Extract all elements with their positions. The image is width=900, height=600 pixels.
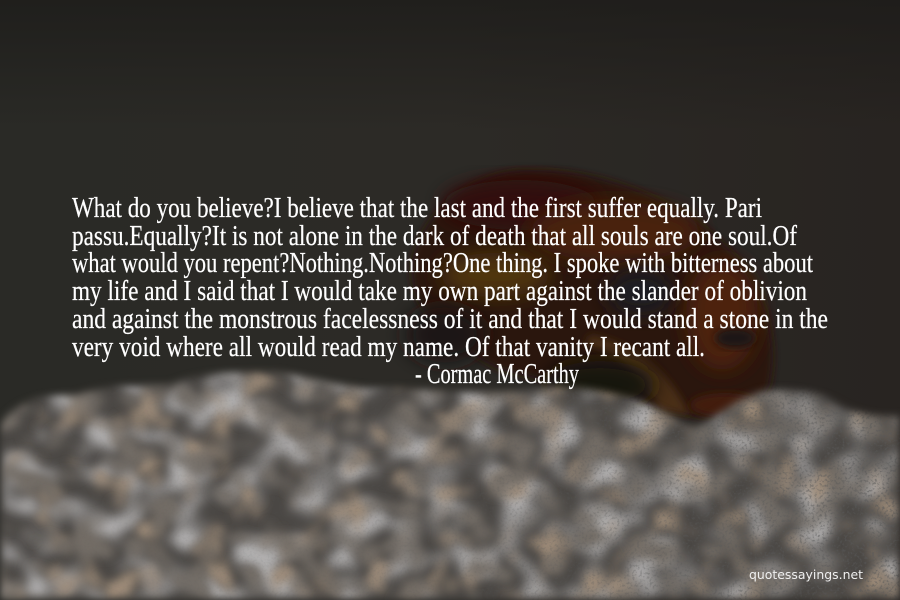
rock texture <box>0 360 900 600</box>
watermark: quotessayings.net <box>749 568 863 582</box>
quote text: very void where all would read my name. Of that vanity I recant all. <box>72 332 705 363</box>
quote text <box>72 193 828 363</box>
orange beetle photo <box>405 170 773 418</box>
attribution: - Cormac McCarthy <box>415 359 579 390</box>
quote text: What do you believe?I believe that the last and the first suffer equally. Pari <box>72 193 762 224</box>
